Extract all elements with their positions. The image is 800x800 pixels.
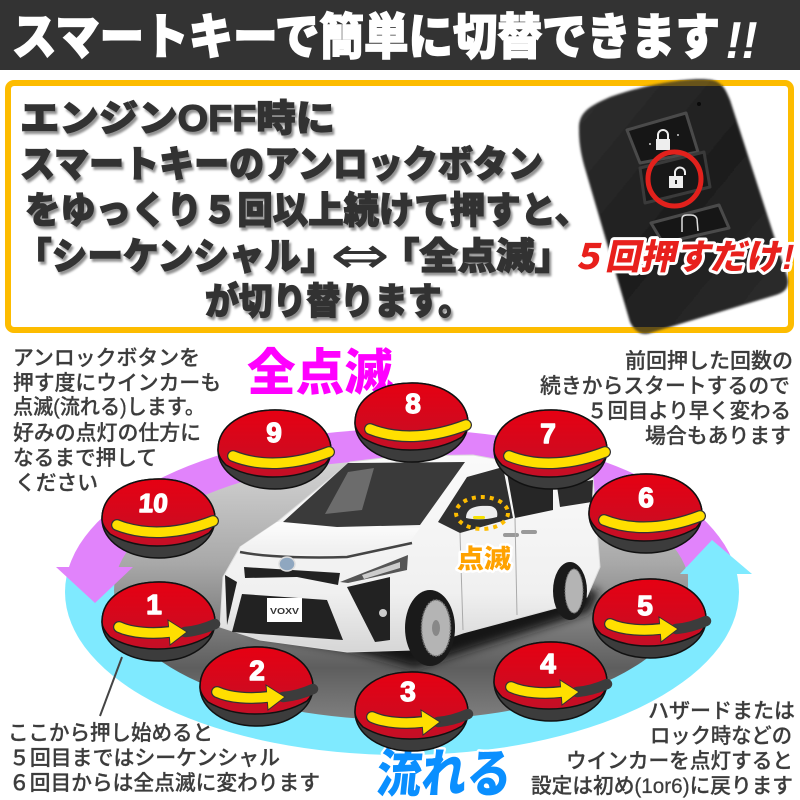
pink upper ring	[69, 430, 730, 567]
text block: upper left note: ください	[15, 472, 98, 495]
text block: upper left note: 押す度にウインカーも	[13, 372, 221, 395]
cycle diagram background	[56, 429, 752, 755]
dome 6: 6	[638, 482, 654, 513]
text block: upper right note	[540, 350, 793, 448]
dome 5	[593, 579, 706, 658]
side windows	[438, 467, 513, 533]
icon: sliding door	[682, 215, 698, 232]
text block: upper left note: アンロックボタンを	[13, 347, 200, 370]
text block: upper right note: 続きからスタートするので	[540, 375, 790, 398]
dome 1	[102, 582, 215, 661]
cyan lower ring	[65, 567, 739, 755]
text block: lower right note: 設定は初め(1or6)に戻ります	[531, 775, 793, 798]
title: スマートキーで簡単に切替できます	[12, 11, 720, 65]
fog lamp surround	[347, 577, 390, 642]
icon: lock	[649, 130, 679, 150]
side mirror	[456, 497, 508, 529]
heading line 2: スマートキーのアンロックボタン	[20, 144, 543, 185]
red highlight circle	[648, 152, 701, 206]
heading line 4a: 「シーケンシャル」	[16, 236, 336, 277]
cyan arrowhead	[680, 540, 752, 574]
car	[220, 455, 600, 668]
dome 6	[589, 474, 702, 553]
heading: all blink: 全点滅	[247, 345, 393, 401]
dome 3	[355, 672, 468, 751]
chrome bar	[240, 543, 412, 557]
rear wheel	[553, 562, 587, 620]
heading line 1: エンジンOFF時に	[20, 98, 335, 139]
licence plate: VOXV	[270, 607, 300, 616]
text block: upper left note: 好みの点灯の仕方に	[13, 422, 201, 445]
dome 8	[355, 383, 468, 462]
dome 3: 3	[400, 676, 416, 707]
lower grille	[232, 594, 343, 640]
connector line	[100, 657, 122, 716]
dome 4: 4	[540, 648, 556, 679]
blinking dots	[456, 497, 508, 529]
dome 2: 2	[249, 655, 265, 686]
text block: lower left note: ここから押し始めると	[8, 722, 213, 745]
callout: press five times: ５回押すだけ!	[568, 238, 799, 277]
icon: unlock	[669, 167, 685, 188]
text block: upper right note: ５回目より早く変わる	[587, 400, 791, 423]
door handles	[505, 532, 535, 535]
icon: smart key	[579, 79, 788, 334]
heading line 3: をゆっくり５回以上続けて押すと、	[25, 190, 590, 231]
text block: upper right note: 場合もあります	[645, 425, 791, 448]
header bar	[0, 0, 800, 70]
dome 8: 8	[405, 388, 421, 419]
text block: lower left note	[8, 722, 320, 795]
gray ground	[114, 460, 690, 720]
dome 7: 7	[540, 418, 556, 449]
text block: lower left note: ５回目まではシーケンシャル	[9, 747, 280, 770]
dome 1: 1	[146, 589, 162, 620]
text block: lower left note: ６回目からは全点滅に変わります	[9, 772, 320, 795]
double arrow: ⇔	[330, 226, 390, 286]
windshield	[283, 462, 465, 527]
dome 7	[494, 410, 607, 489]
front wheel	[405, 590, 455, 666]
heading line 5: が切り替ります。	[205, 280, 472, 322]
text block: upper right note: 前回押した回数の	[625, 350, 793, 373]
text block: lower right note: ハザードまたは	[648, 700, 795, 723]
dome 9	[218, 410, 331, 489]
dome 4	[494, 642, 607, 721]
text block: lower right note: ロック時などの	[650, 725, 792, 748]
licence plate	[267, 598, 302, 622]
text block: upper left note	[13, 347, 221, 495]
dome 10: 10	[138, 488, 169, 518]
door line	[460, 518, 517, 630]
headlight	[340, 555, 408, 583]
dome 10	[102, 479, 215, 558]
upper grille	[244, 567, 340, 585]
dome 9: 9	[266, 417, 282, 448]
text block: upper left note: なるまで押して	[13, 447, 157, 470]
pink arrowhead	[56, 567, 133, 603]
heading line 4b: 「全点滅」	[381, 236, 573, 277]
text block: lower right note	[531, 700, 795, 798]
dome 2	[200, 647, 313, 726]
label: blink: 点滅	[457, 544, 511, 574]
title exclamation marks: !!	[721, 12, 763, 70]
dome 5: 5	[637, 590, 653, 621]
left intake	[225, 575, 237, 625]
text block: lower right note: ウインカーを点灯すると	[566, 750, 793, 773]
text block: upper left note: 点滅(流れる)します。	[13, 396, 205, 419]
toyota emblem	[279, 557, 295, 571]
panel: instructions	[8, 79, 799, 334]
